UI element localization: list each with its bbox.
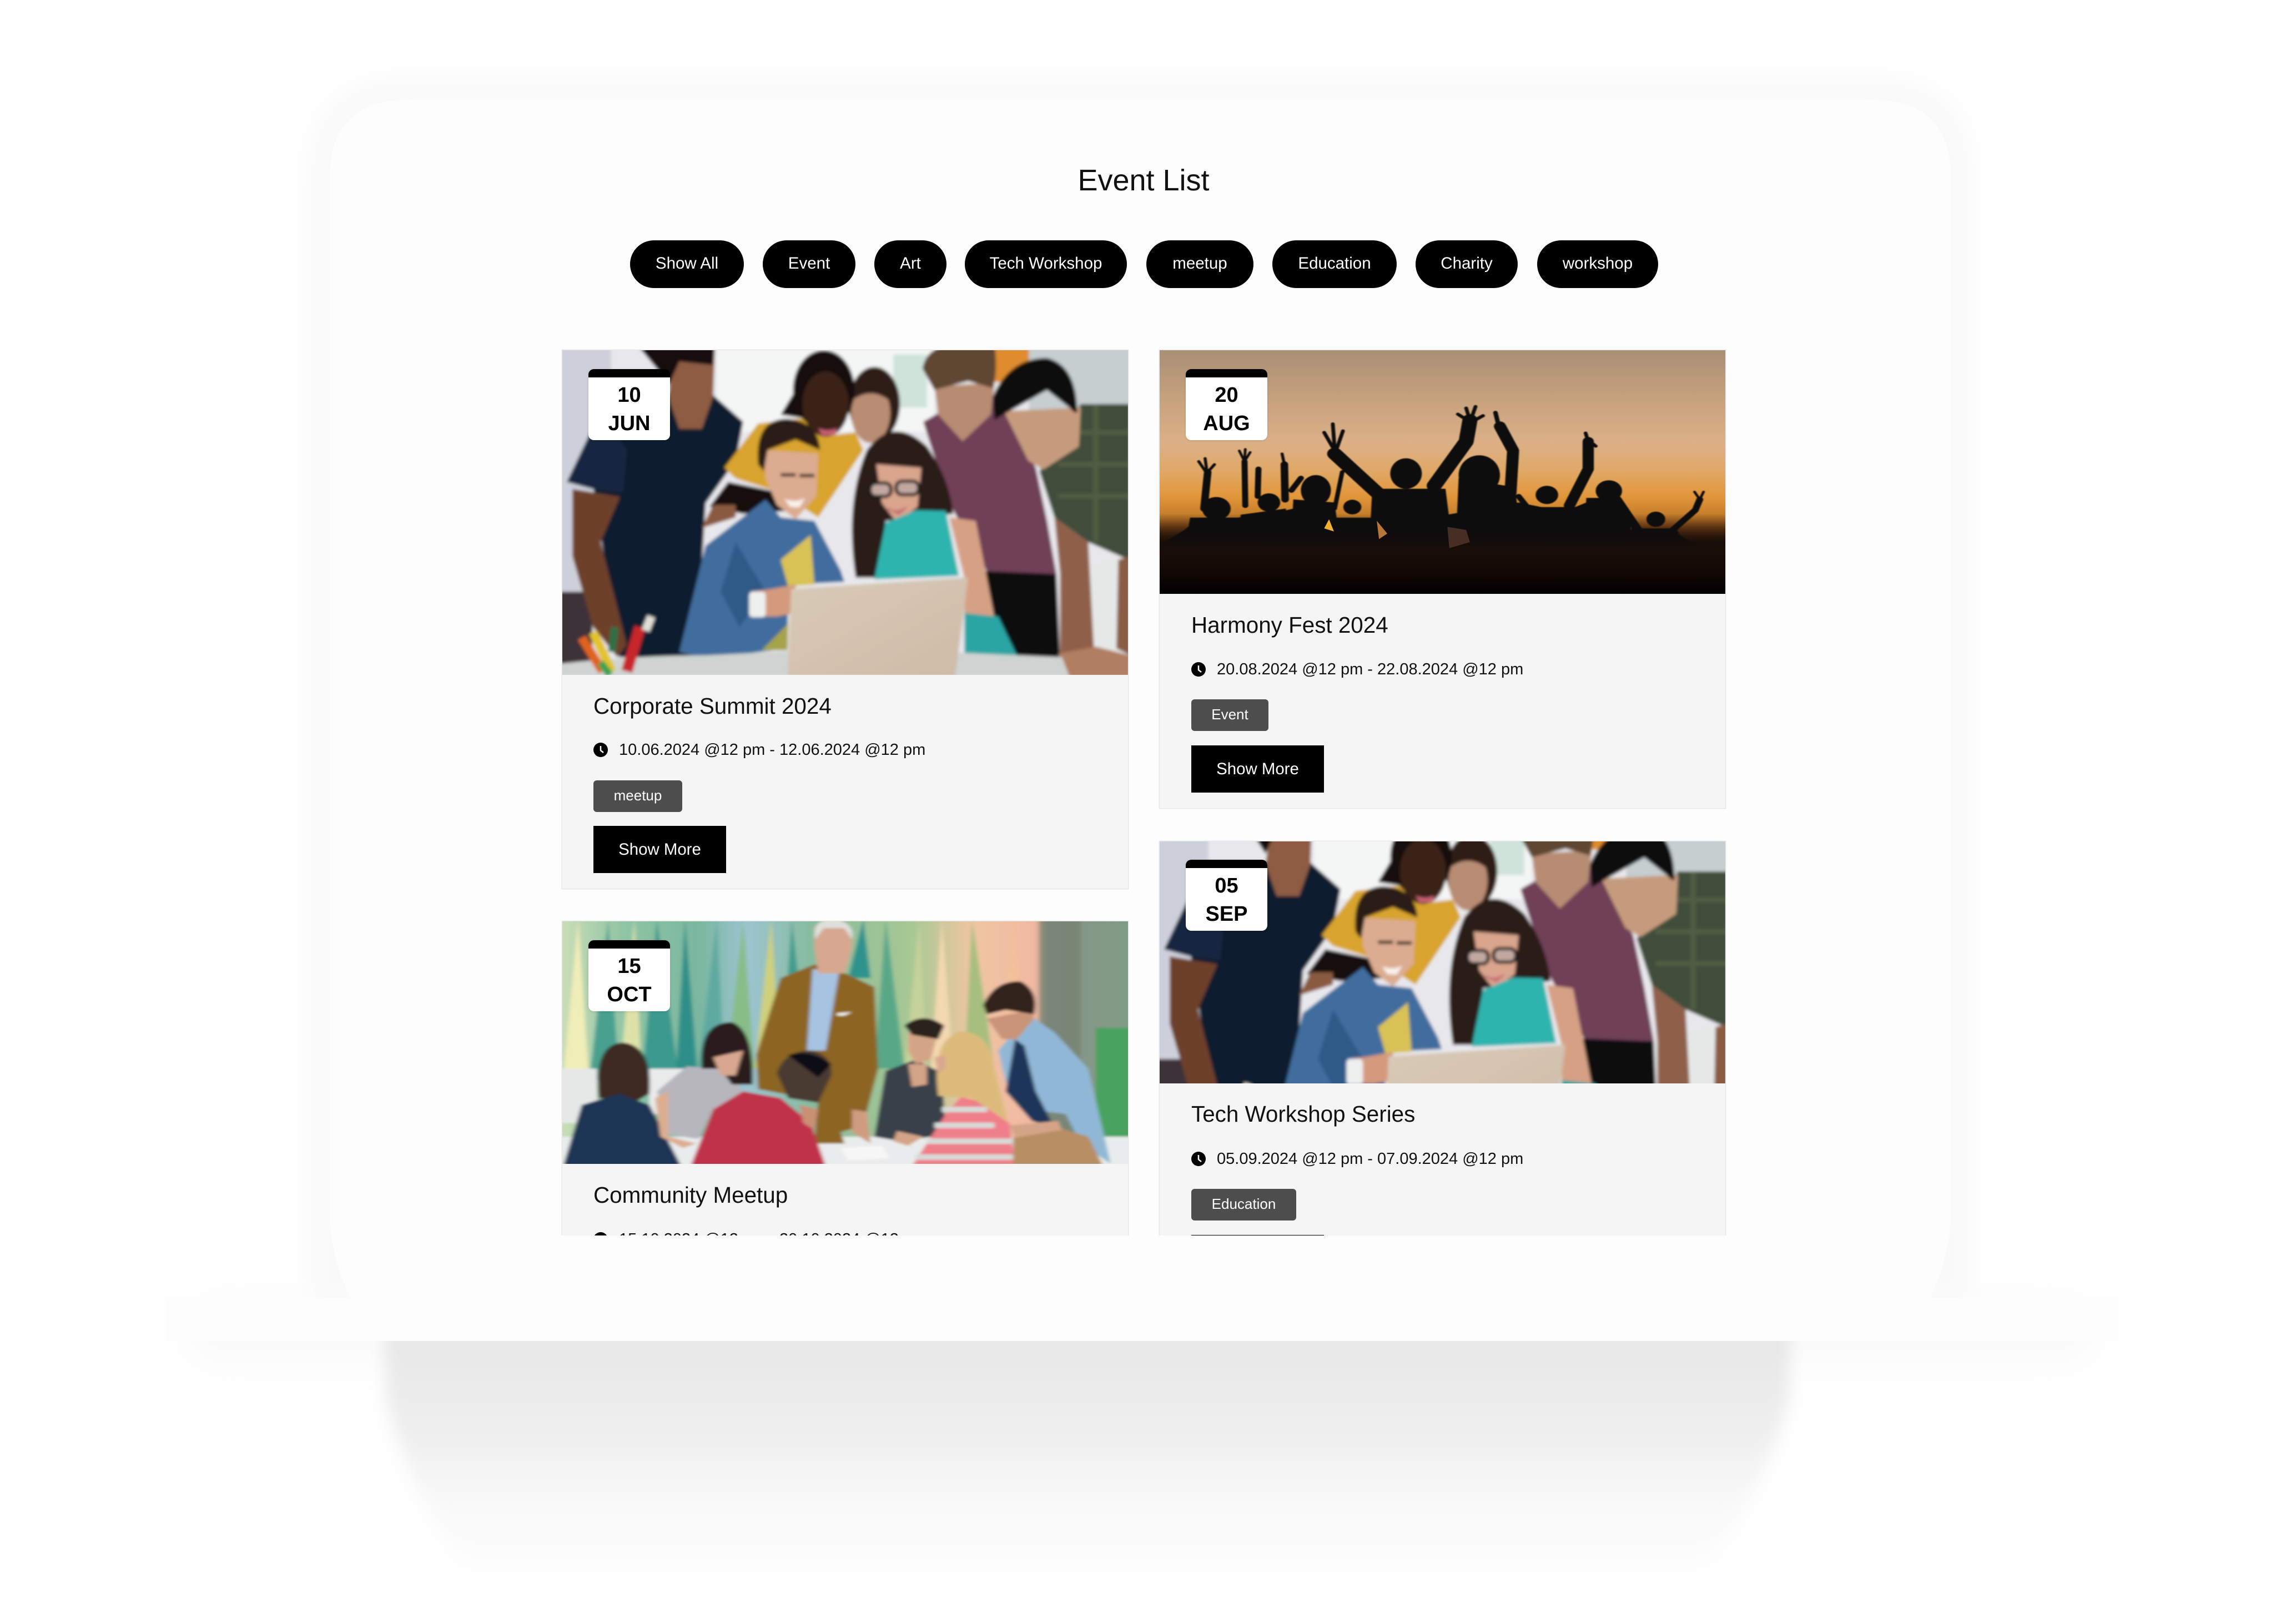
shadow beneath laptop [384,1329,1791,1573]
date badge [1186,369,1267,440]
show more button [1191,1235,1324,1282]
date badge: OCT [607,983,652,1006]
base glow [189,1304,2093,1360]
date badge: AUG [1203,412,1250,435]
filter: Show All: Show All [656,254,718,273]
filter: Tech Workshop: Tech Workshop [990,254,1102,273]
event title: Harmony Fest 2024 [1191,612,1388,638]
category tag: meetup [614,787,662,804]
event dates: 10.06.2024 @12 pm - 12.06.2024 @12 pm [619,741,925,759]
laptop screen [330,100,1951,1299]
panel: Tech Workshop Series card [1160,841,1725,1285]
filter: Art: Art [900,254,921,273]
filter: workshop: workshop [1563,254,1633,273]
event dates: 05.09.2024 @12 pm - 07.09.2024 @12 pm [1217,1150,1523,1168]
filter: Show All [630,240,744,288]
woman yellow shirt [724,418,863,517]
filter: Art [874,240,946,288]
table papers [840,1146,889,1161]
title: Event List [1077,164,1210,197]
date badge [588,369,670,440]
date badge: 20 [1215,384,1238,407]
left crowd [1202,497,1231,520]
left woman [598,1042,650,1101]
category tag [1191,699,1268,731]
man maroon shirt [923,397,1056,582]
screen glow [311,81,1970,1302]
category tag: Education [1212,1196,1276,1212]
man navy shirt [567,394,743,657]
woman with glasses [852,431,953,578]
filter: meetup [1146,240,1253,288]
category filter pills [630,240,1658,288]
laptop base [167,1298,2115,1341]
category tag [1191,1189,1296,1220]
show more button: Show More [618,840,701,859]
photo: group meeting [562,921,1128,1164]
event list viewport [562,164,1726,1235]
long hair person [1459,455,1500,495]
panel: Corporate Summit card [562,350,1128,889]
category tag [593,780,682,812]
filter: Tech Workshop [965,240,1127,288]
category tag: Event [1211,706,1248,723]
right crowd [1535,486,1558,504]
filter: Charity: Charity [1441,254,1493,273]
blonde woman [936,1031,1008,1121]
show more button [1191,745,1324,793]
date badge: 15 [617,955,641,978]
standing man [756,965,878,1143]
seated man [874,1060,946,1141]
filter: Event: Event [788,254,830,273]
table [556,651,788,677]
panel: Harmony Fest card [1160,350,1725,808]
date badge: 10 [617,384,641,407]
filter: Education: Education [1298,254,1371,273]
filter: Education [1272,240,1397,288]
show more button [593,826,726,873]
filter: Charity [1416,240,1518,288]
photo: team around laptop (cropped) [1160,841,1725,1083]
event title: Community Meetup [593,1182,788,1208]
filter: meetup: meetup [1172,254,1227,273]
date badge: 05 [1215,874,1238,897]
filter: Event [763,240,855,288]
date badge: JUN [608,412,651,435]
date badge: SEP [1205,902,1248,926]
date badge [588,940,670,1011]
event title: Corporate Summit 2024 [593,693,832,719]
central person [1390,458,1422,489]
man plaid shirt [1040,404,1130,561]
show more button: Show More [1216,760,1299,778]
event title: Tech Workshop Series [1191,1101,1415,1127]
photo: crowd silhouettes at sunset [1160,350,1725,594]
panel: Community Meetup card [562,921,1128,1310]
event dates: 20.08.2024 @12 pm - 22.08.2024 @12 pm [1217,660,1523,678]
filter: workshop [1537,240,1658,288]
laptop [787,578,968,677]
standing student [998,1014,1111,1164]
woman behind [849,367,900,441]
man in red [691,1091,825,1166]
woman denim jacket [679,500,844,659]
woman striped [657,1066,743,1139]
pens [582,638,602,672]
photo: team around laptop [562,350,1128,675]
date badge [1186,860,1267,931]
